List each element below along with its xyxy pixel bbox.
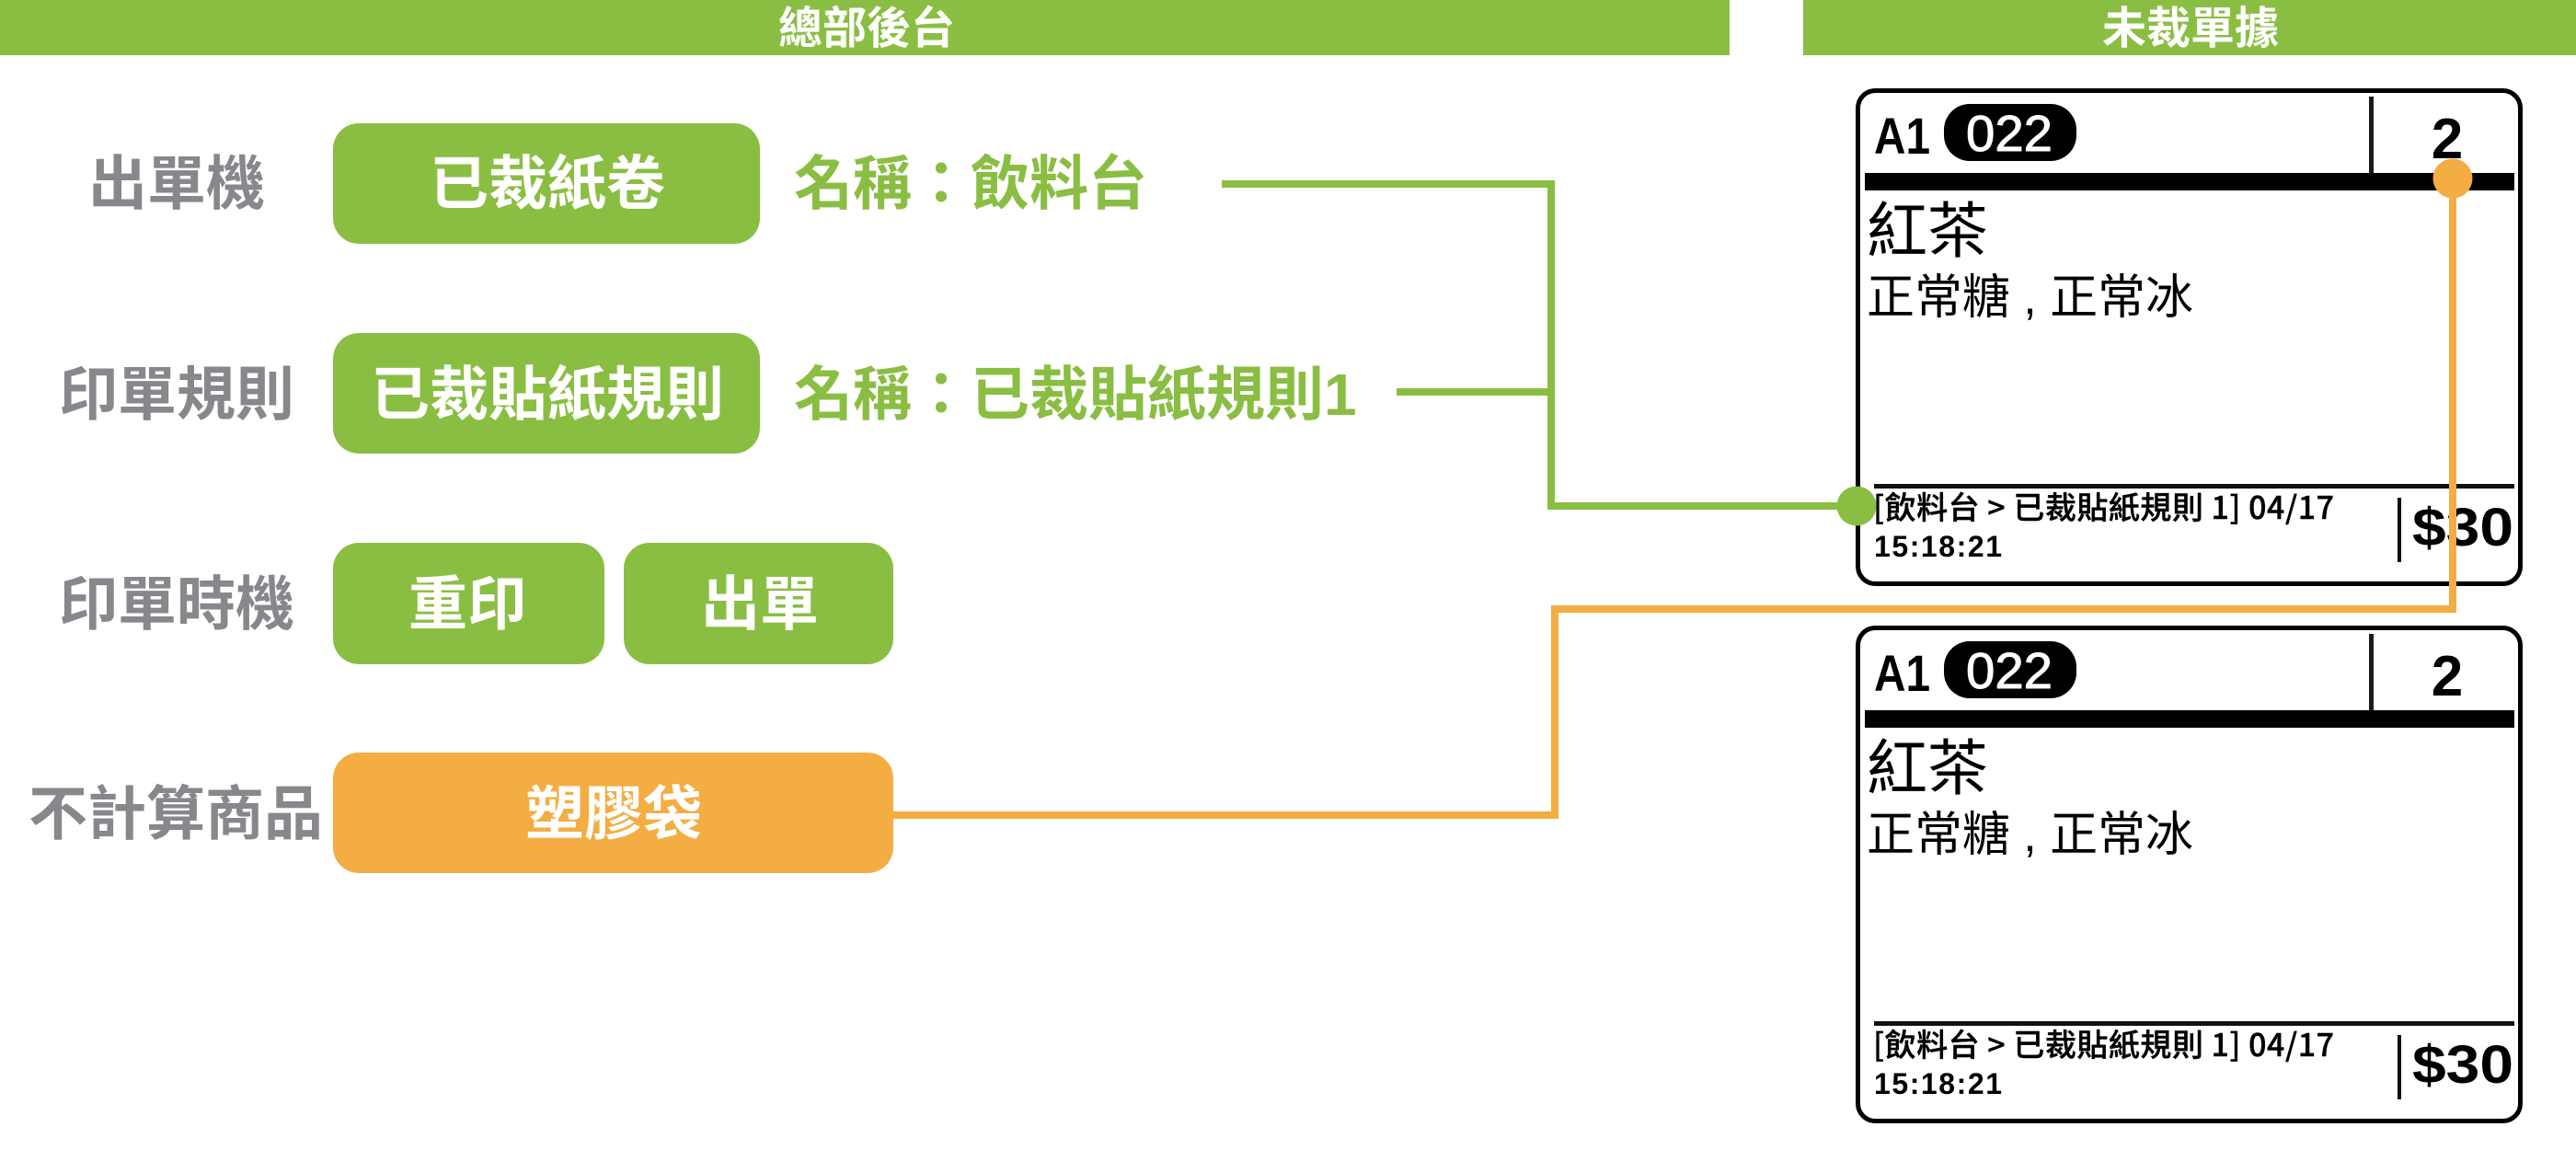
button: plastic bag	[333, 753, 893, 873]
receipt: bottom: 022	[1966, 642, 2053, 699]
receipt: top: 022	[1966, 105, 2053, 162]
connector: green lines from names to receipt footer	[1222, 184, 1877, 526]
header: uncut receipts: 未裁單據	[2102, 5, 2279, 53]
button: issue order	[624, 543, 893, 664]
header: uncut receipts	[1803, 0, 2576, 55]
header: backend: 總部後台	[778, 5, 955, 53]
button: plastic bag: 塑膠袋	[525, 781, 702, 847]
row label: print timing: 印單時機	[59, 571, 294, 638]
receipt: top: 正常糖 , 正常冰	[1867, 271, 2193, 325]
connector: orange line from plastic bag to item count	[893, 158, 2473, 815]
receipt: top	[1858, 90, 2521, 583]
receipt: bottom: A1	[1874, 644, 1930, 702]
button: cut sticker rule: 已裁貼紙規則	[371, 362, 724, 428]
receipt: top: $30	[2412, 498, 2513, 558]
button: reprint	[333, 543, 604, 664]
row label: printer: 出單機	[88, 151, 265, 217]
row label: print rule: 印單規則	[59, 362, 294, 428]
button: reprint: 重印	[408, 571, 526, 638]
receipt: bottom: $30	[2412, 1035, 2513, 1095]
receipt: bottom: 紅茶	[1867, 734, 1988, 802]
receipt: top: 15:18:21	[1874, 530, 2002, 563]
button: issue order: 出單	[701, 571, 819, 638]
button: cut paper roll: 已裁紙卷	[430, 151, 665, 217]
receipt: top: A1	[1874, 107, 1930, 165]
receipt: bottom: 正常糖 , 正常冰	[1867, 809, 2193, 862]
receipt: top: 2	[2432, 108, 2463, 171]
receipt: top: 紅茶	[1867, 197, 1988, 265]
receipt: bottom	[1858, 627, 2521, 1121]
name label: drinks station: 名稱：飲料台	[794, 151, 1147, 217]
receipt: bottom: [飲料台 > 已裁貼紙規則 1] 04/17	[1873, 1020, 2334, 1065]
header: backend	[0, 0, 1730, 55]
button: cut sticker rule	[333, 333, 760, 454]
receipt: bottom: 15:18:21	[1874, 1067, 2002, 1100]
row label: uncounted items: 不計算商品	[29, 781, 323, 847]
receipt: bottom: 2	[2432, 645, 2463, 708]
receipt: top: [飲料台 > 已裁貼紙規則 1] 04/17	[1873, 483, 2334, 528]
button: cut paper roll	[333, 123, 760, 244]
name label: cut sticker rule 1: 名稱：已裁貼紙規則1	[794, 362, 1357, 428]
